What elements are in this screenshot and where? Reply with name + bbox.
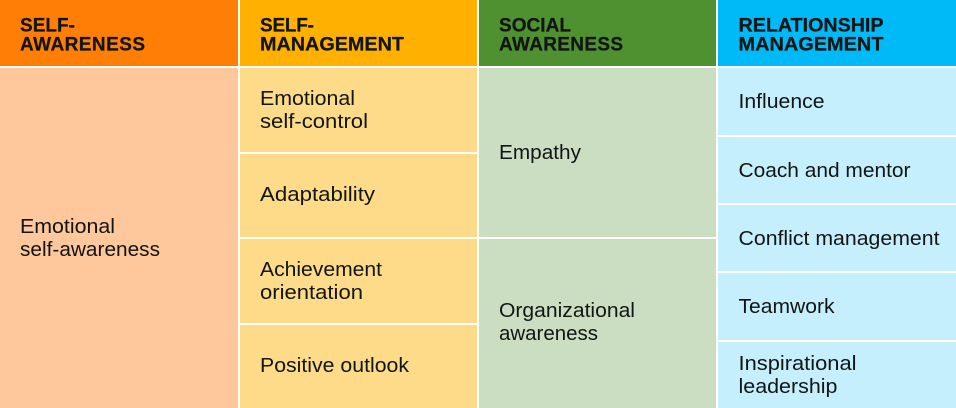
header: relationship management: MANAGEMENT [738,34,884,56]
cell: emotional self-control [240,68,477,152]
column: self-awareness [0,0,238,408]
cell: coach and mentor: Coach and mentor [738,160,911,182]
cell: emotional self-awareness: Emotional [20,216,115,238]
cell: inspirational leadership: Inspirational [738,353,856,375]
cell: emotional self-control: Emotional [260,88,355,110]
cell: positive outlook [240,325,477,408]
cell: teamwork [718,273,956,340]
cell: conflict management: Conflict management [738,228,940,250]
cell: achievement orientation: orientation [260,282,363,304]
cell: achievement orientation: Achievement [260,259,382,281]
cell: adaptability [240,154,477,237]
header: self-awareness: SELF- [20,16,75,36]
cell: achievement orientation [240,239,477,323]
cell: adaptability: Adaptability [260,184,375,206]
header: self-management [240,0,477,66]
header: self-awareness [0,0,238,66]
cell: organizational awareness: Organizational [499,300,635,322]
header: relationship management: RELATIONSHIP [738,16,884,36]
header: social awareness [479,0,716,66]
cell: coach and mentor [718,137,956,203]
cell: conflict management [718,205,956,271]
cell: emotional self-awareness: self-awareness [20,239,160,261]
cell: influence [718,68,956,135]
cell: inspirational leadership: leadership [738,376,838,398]
column: social awareness [479,0,716,408]
cell: empathy: Empathy [499,142,581,164]
header: self-awareness: AWARENESS [20,34,145,56]
cell: organizational awareness [479,239,716,408]
cell: emotional self-control: self-control [260,111,368,133]
cell: inspirational leadership [718,342,956,408]
header: relationship management [718,0,956,66]
header: self-management: MANAGEMENT [260,34,404,56]
cell: teamwork: Teamwork [738,296,836,318]
cell: emotional self-awareness [0,68,238,408]
cell: influence: Influence [738,91,824,113]
header: social awareness: SOCIAL [499,16,571,36]
header: social awareness: AWARENESS [499,34,623,56]
column: relationship management [718,0,956,408]
header: self-management: SELF- [260,16,314,36]
cell: positive outlook: Positive outlook [260,355,410,377]
cell: empathy [479,68,716,237]
cell: organizational awareness: awareness [499,323,598,345]
column: self-management [240,0,477,408]
